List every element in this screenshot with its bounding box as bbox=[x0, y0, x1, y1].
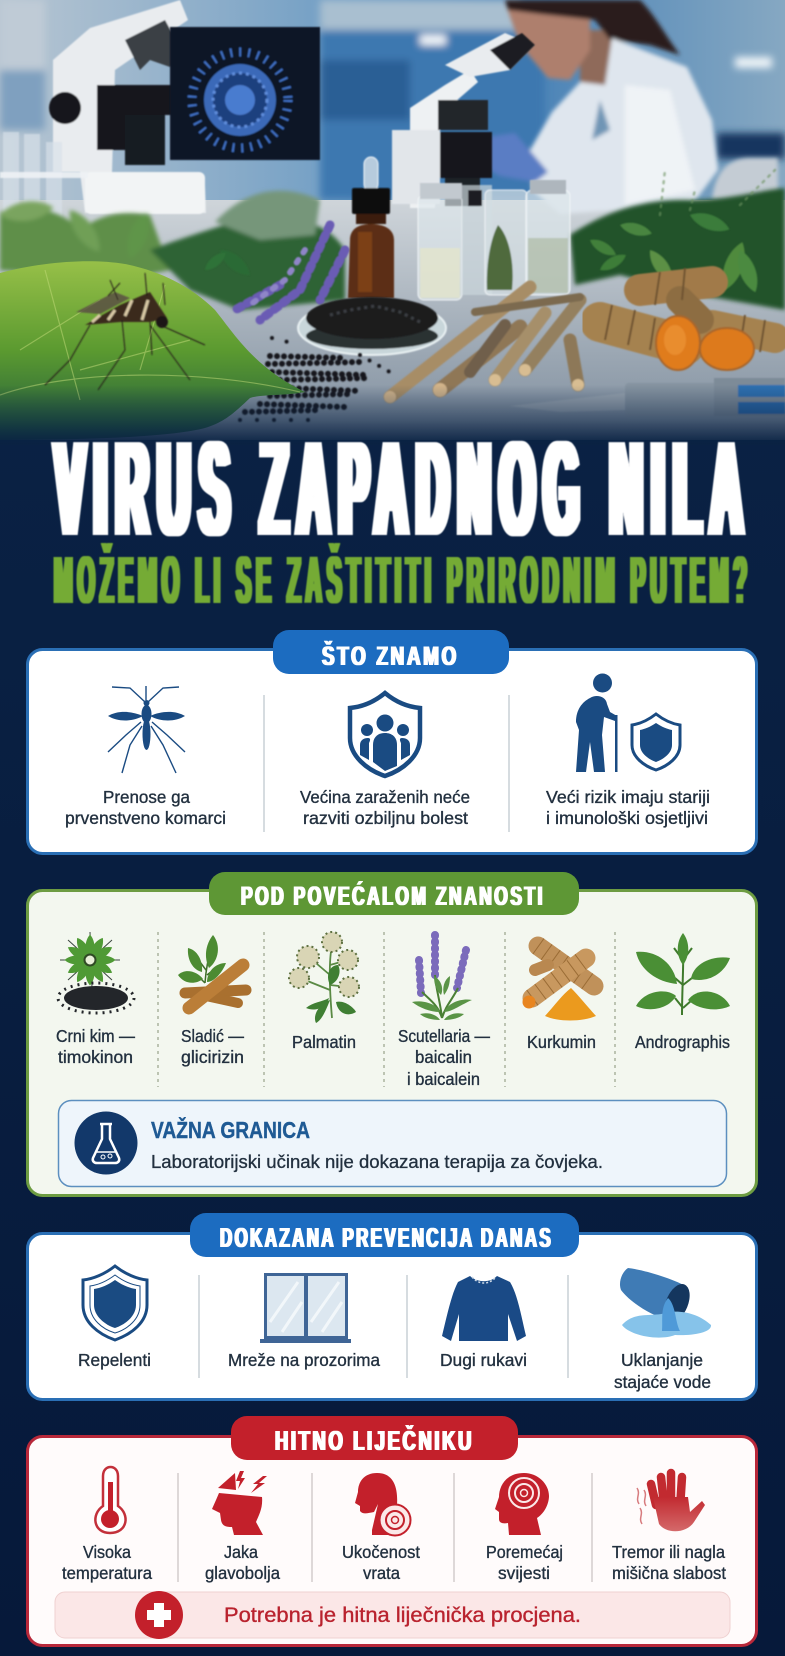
heading pill: što znamo: ŠTO ZNAMO bbox=[322, 640, 459, 671]
text: scutellaria: baicalin bbox=[415, 1047, 472, 1067]
icon: tipped container with water bbox=[620, 1268, 711, 1338]
icon: window with screen bbox=[260, 1273, 351, 1343]
heading pill: pod povećalom znanosti bbox=[209, 872, 579, 915]
office chair bbox=[712, 158, 778, 205]
icon: trembling hand bbox=[637, 1473, 705, 1531]
text: prenose: prvenstveno komarci bbox=[65, 808, 226, 828]
text: crni kim: Crni kim — bbox=[56, 1026, 135, 1046]
icon: thermometer bbox=[95, 1467, 126, 1533]
dish of black seeds bbox=[298, 297, 446, 355]
text: visoka temperatura: Visoka bbox=[83, 1542, 131, 1562]
text: kurkumin: Kurkumin bbox=[527, 1032, 596, 1052]
test tubes bbox=[0, 132, 88, 222]
callout: važna granica bbox=[58, 1100, 726, 1186]
scientist bbox=[478, 0, 718, 214]
text: uklanjanje stajaće vode: stajaće vode bbox=[614, 1372, 711, 1392]
text: uklanjanje stajaće vode bbox=[614, 1350, 711, 1392]
icon: flask bbox=[74, 1112, 138, 1174]
text: ukočenost vrata bbox=[342, 1542, 420, 1583]
amber dropper bottle bbox=[348, 157, 394, 298]
text: veći rizik bbox=[546, 787, 710, 828]
text: većina bbox=[300, 787, 470, 828]
text: scutellaria: Scutellaria — bbox=[398, 1026, 490, 1046]
text: sladić: Sladić — bbox=[181, 1026, 244, 1046]
text: scutellaria: i baicalein bbox=[407, 1069, 480, 1089]
monitor with virus bbox=[170, 27, 320, 160]
text: tremor: Tremor ili nagla bbox=[612, 1542, 725, 1562]
text: repelenti: Repelenti bbox=[78, 1350, 151, 1370]
icon: medical cross bbox=[135, 1591, 183, 1639]
icon: shield with people bbox=[350, 693, 420, 776]
text: scutellaria bbox=[398, 1026, 490, 1089]
icon: small shield bbox=[632, 714, 680, 770]
heading pill: hitno liječniku: HITNO LIJEČNIKU bbox=[275, 1424, 474, 1456]
text: sladić: glicirizin bbox=[181, 1047, 244, 1067]
text: tremor bbox=[612, 1542, 726, 1583]
panel: pod povećalom znanosti bbox=[28, 872, 756, 1196]
text: visoka temperatura bbox=[62, 1542, 152, 1583]
text: crni kim: timokinon bbox=[58, 1047, 133, 1067]
text: većina: Većina zaraženih neće bbox=[300, 787, 470, 807]
pipette bbox=[510, 378, 785, 417]
hero photo: laboratory and herbs bbox=[0, 0, 785, 445]
text: mreže na prozorima: Mreže na prozorima bbox=[228, 1350, 380, 1370]
text: visoka temperatura: temperatura bbox=[62, 1563, 152, 1583]
text: tremor: mišična slabost bbox=[612, 1563, 726, 1583]
heading pill: hitno liječniku bbox=[231, 1416, 518, 1460]
text: dugi rukavi: Dugi rukavi bbox=[440, 1350, 527, 1370]
icon: turmeric bbox=[522, 946, 596, 1020]
text: ukočenost vrata: Ukočenost bbox=[342, 1542, 420, 1562]
heading pill: pod povećalom znanosti: POD POVEĆALOM ZNANOSTI bbox=[241, 880, 545, 911]
text: ukočenost vrata: vrata bbox=[363, 1563, 400, 1583]
text: poremećaj svijesti bbox=[486, 1542, 563, 1583]
text: poremećaj svijesti: Poremećaj bbox=[486, 1542, 563, 1562]
heading pill: dokazana prevencija danas: DOKAZANA PREVENCIJA DANAS bbox=[220, 1222, 553, 1253]
text: jaka glavobolja bbox=[205, 1542, 280, 1583]
text: laboratorijski učinak: Laboratorijski učinak nije dokazana terapija za čovjeka. bbox=[151, 1152, 603, 1172]
icon: repellent shield bbox=[83, 1266, 147, 1340]
panel: što znamo bbox=[28, 630, 756, 854]
text: prenose: Prenose ga bbox=[103, 787, 190, 807]
icon: palmatin plant bbox=[289, 932, 359, 1023]
heading pill: dokazana prevencija danas bbox=[190, 1213, 579, 1257]
icon: head with headache bbox=[212, 1471, 267, 1535]
text: andrographis: Andrographis bbox=[635, 1032, 730, 1052]
panel: hitno liječniku bbox=[28, 1416, 756, 1646]
text: uklanjanje stajaće vode: Uklanjanje bbox=[621, 1350, 703, 1370]
text: većina: razviti ozbiljnu bolest bbox=[303, 808, 468, 828]
text: veći rizik: Veći rizik imaju stariji bbox=[546, 787, 710, 807]
icon: mosquito bbox=[108, 686, 185, 773]
icon: andrographis bbox=[636, 933, 730, 1015]
icon: head with confusion bbox=[495, 1473, 549, 1535]
icon: licorice bbox=[178, 935, 246, 1008]
turmeric bbox=[600, 268, 775, 370]
text: veći rizik: i imunološki osjetljivi bbox=[546, 808, 708, 828]
scattered seeds bbox=[240, 338, 395, 420]
herb sprigs on the right bbox=[202, 170, 775, 320]
herbs in background bbox=[0, 188, 785, 310]
icon: long-sleeve shirt bbox=[442, 1276, 526, 1341]
icon: stiff neck bbox=[355, 1473, 410, 1536]
mosquito on leaf bbox=[45, 273, 205, 390]
second microscope bbox=[392, 33, 535, 208]
icon: scutellaria bbox=[412, 935, 472, 1020]
callout: urgent banner bbox=[55, 1591, 730, 1639]
icon: elderly person with cane bbox=[576, 674, 618, 772]
glass vials bbox=[418, 180, 570, 300]
icon: black cumin bbox=[58, 932, 134, 1013]
fade into dark background bbox=[0, 385, 785, 445]
text: poremećaj svijesti: svijesti bbox=[498, 1563, 550, 1583]
text: važna granica heading: VAŽNA GRANICA bbox=[151, 1116, 310, 1143]
table surface bbox=[0, 200, 785, 440]
heading pill: što znamo bbox=[273, 630, 509, 674]
text: palmatin: Palmatin bbox=[292, 1032, 356, 1052]
background microscope bbox=[49, 0, 206, 214]
text: crni kim bbox=[56, 1026, 135, 1067]
text: jaka glavobolja: Jaka bbox=[224, 1542, 258, 1562]
panel: dokazana prevencija danas bbox=[28, 1213, 756, 1400]
text: jaka glavobolja: glavobolja bbox=[205, 1563, 280, 1583]
large green leaf bbox=[0, 261, 305, 440]
licorice roots bbox=[384, 287, 584, 403]
text: prenose bbox=[65, 787, 226, 828]
text: sladić bbox=[181, 1026, 244, 1067]
text: potrebna procjena: Potrebna je hitna liječnička procjena. bbox=[224, 1604, 581, 1627]
